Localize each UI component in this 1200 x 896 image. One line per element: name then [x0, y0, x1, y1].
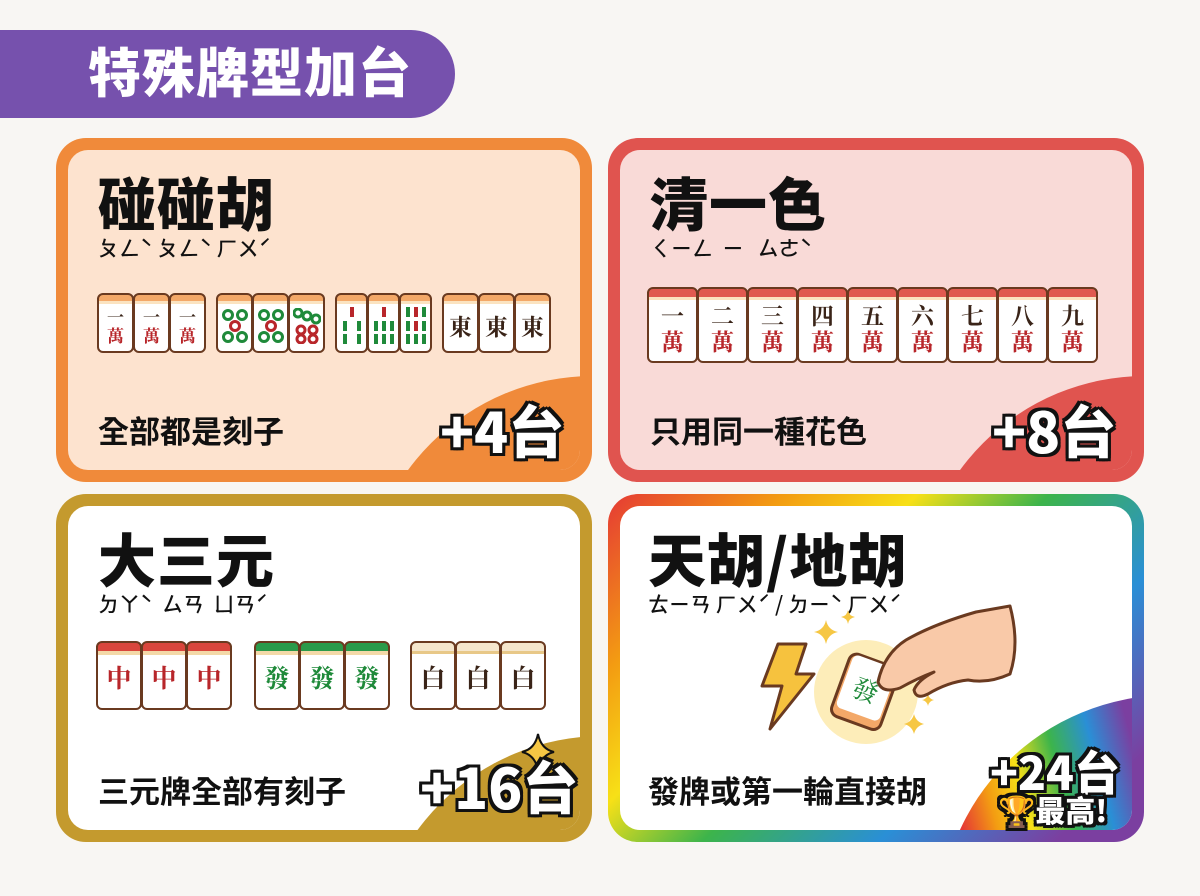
tiles row: 白	[510, 659, 536, 695]
phonetic: ㄆㄥˋ ㄆㄥˋ ㄏㄨˊ	[98, 233, 271, 263]
tiles row: 七	[961, 298, 984, 331]
tiles row: 萬	[711, 324, 734, 356]
tiles row: 東	[521, 309, 544, 342]
phonetic: ㄉㄚˋ ㄙㄢ ㄩㄢˊ	[98, 589, 268, 619]
tiles row: 五	[861, 298, 884, 331]
tiles row: 一	[143, 303, 160, 328]
title text: 特殊牌型加台	[88, 32, 412, 108]
tiles row: 萬	[1061, 324, 1084, 356]
tiles row: 東	[449, 309, 472, 342]
panel: 大三元	[56, 494, 592, 842]
illustration: hand placing tile	[760, 604, 1016, 744]
title banner	[0, 30, 455, 118]
tiles row: 三	[761, 298, 784, 331]
heading: 清一色	[650, 159, 827, 243]
badge text: +16台	[420, 745, 578, 826]
badge text: +24台	[990, 738, 1120, 804]
tiles row: 萬	[961, 324, 984, 356]
description: 全部都是刻子	[98, 407, 284, 452]
tiles row: 萬	[143, 322, 160, 346]
heading: 天胡/地胡	[648, 515, 907, 599]
tiles row: 二	[711, 298, 734, 331]
badge: +4台	[364, 376, 822, 834]
badge subtext: trophy 最高: 🏆最高!	[998, 787, 1107, 831]
tiles row: 東	[485, 309, 508, 342]
tiles row: 九	[1061, 298, 1084, 331]
badge text: +8台	[992, 389, 1116, 470]
description: 只用同一種花色	[650, 407, 867, 452]
tiles row: 一	[179, 303, 196, 328]
tiles row	[647, 287, 1098, 363]
tiles row: 一	[661, 298, 684, 331]
tiles row: 六	[911, 298, 934, 331]
tiles row: 中	[106, 659, 132, 695]
heading: 碰碰胡	[98, 159, 275, 243]
tiles row: 中	[196, 659, 222, 695]
tiles row: 白	[420, 659, 446, 695]
tiles row: 萬	[861, 324, 884, 356]
badge: +16台	[373, 736, 833, 896]
tiles row: 萬	[107, 322, 124, 346]
tiles row: 發	[354, 659, 380, 695]
panel: 天胡/地胡	[608, 494, 1144, 842]
illustration: hand placing tile: 發	[847, 668, 884, 711]
badge: +8台	[916, 376, 1200, 834]
icon: lightning bolt	[762, 644, 814, 729]
tiles row: 萬	[761, 324, 784, 356]
panel: 清一色	[608, 138, 1144, 482]
phonetic: ㄑㄧㄥ ㄧ ㄙㄜˋ	[650, 233, 812, 263]
phonetic: ㄊㄧㄢ ㄏㄨˊ / ㄉㄧˋ ㄏㄨˊ	[648, 589, 902, 619]
tiles row: 萬	[661, 324, 684, 356]
tiles row: 中	[151, 659, 176, 695]
description: 三元牌全部有刻子	[98, 767, 346, 812]
tiles row: 萬	[811, 324, 834, 356]
tiles row	[97, 293, 551, 353]
heading: 大三元	[98, 515, 275, 599]
tiles row: 發	[264, 659, 290, 695]
tiles row: 發	[309, 659, 334, 695]
icon: sparkle	[522, 734, 554, 764]
tiles row: 一	[107, 303, 124, 328]
tiles row	[96, 641, 546, 710]
tiles row: 萬	[179, 322, 196, 346]
badge: +24台	[939, 695, 1200, 896]
tiles row: 八	[1011, 298, 1034, 331]
tiles row: 白	[465, 659, 490, 695]
tiles row: 萬	[911, 324, 934, 356]
badge text: +4台	[440, 389, 564, 470]
panel: 碰碰胡	[56, 138, 592, 482]
description: 發牌或第一輪直接胡	[648, 767, 927, 812]
tiles row: 四	[811, 298, 834, 331]
tiles row: 萬	[1011, 324, 1034, 356]
